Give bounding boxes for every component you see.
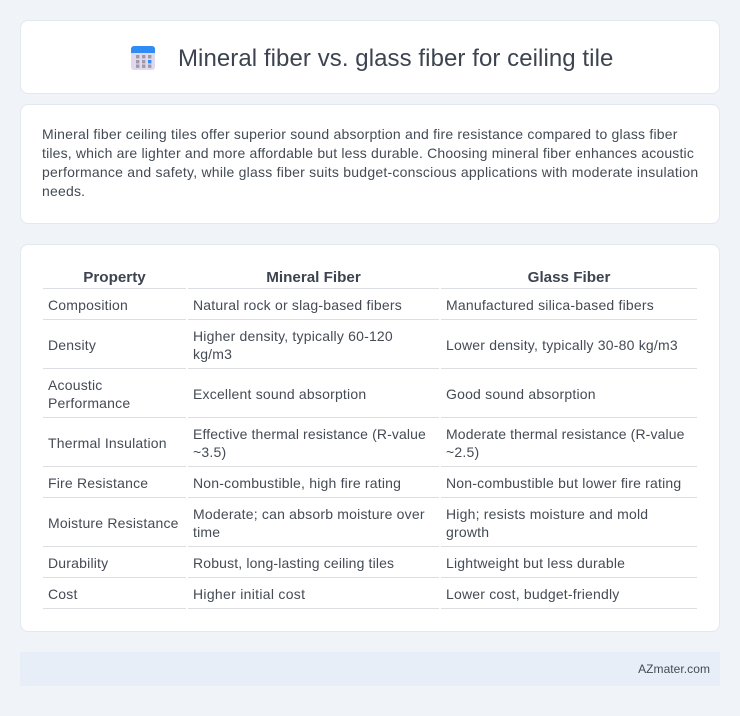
title: Mineral fiber vs. glass fiber for ceiling tile [178,45,613,72]
comparison table: Acoustic [48,377,103,393]
title card [20,20,720,94]
comparison table: Higher density, typically 60-120 [193,328,393,344]
comparison table: Property [83,269,146,286]
comparison table: Moderate thermal resistance (R-value [446,426,685,442]
comparison table: Moisture Resistance [48,515,179,531]
comparison table: Non-combustible, high fire rating [193,475,401,491]
comparison table: Fire Resistance [48,475,148,491]
comparison table: Lower density, typically 30-80 kg/m3 [446,337,678,353]
comparison table: Lower cost, budget-friendly [446,586,620,602]
summary text: Mineral fiber ceiling tiles offer superior sound absorption and fire resistance compared to glass fiber [42,126,678,142]
comparison table: ~3.5) [193,444,226,460]
summary text: tiles, which are lighter and more affordable but less durable. Choosing mineral fiber enhances acoustic [42,145,694,161]
comparison table: High; resists moisture and mold [446,506,648,522]
comparison table: Robust, long-lasting ceiling tiles [193,555,394,571]
comparison table [43,269,697,609]
comparison table: Composition [48,297,128,313]
comparison table card [20,244,720,632]
comparison table: time [193,524,220,540]
summary text: performance and safety, while glass fiber suits budget-conscious applications with moderate insulation [42,164,698,180]
comparison table: ~2.5) [446,444,479,460]
comparison table: Manufactured silica-based fibers [446,297,654,313]
comparison table: Excellent sound absorption [193,386,366,402]
comparison table: Natural rock or slag-based fibers [193,297,402,313]
comparison table: Thermal Insulation [48,435,167,451]
comparison table: Good sound absorption [446,386,596,402]
summary text: needs. [42,183,85,199]
comparison table: Durability [48,555,108,571]
comparison table: Cost [48,586,78,602]
comparison table: Mineral Fiber [266,269,361,286]
comparison table: Glass Fiber [528,269,610,286]
comparison table: Higher initial cost [193,586,305,602]
summary text [42,126,698,199]
comparison table: Lightweight but less durable [446,555,625,571]
comparison table: Non-combustible but lower fire rating [446,475,681,491]
comparison table: growth [446,524,489,540]
footer credit: AZmater.com [638,662,710,676]
comparison table: Effective thermal resistance (R-value [193,426,426,442]
summary card [20,104,720,224]
icon: calendar grid [131,46,155,70]
comparison table: kg/m3 [193,346,232,362]
comparison table: Performance [48,395,130,411]
comparison table: Moderate; can absorb moisture over [193,506,425,522]
footer bar [20,652,720,686]
comparison table: Density [48,337,96,353]
